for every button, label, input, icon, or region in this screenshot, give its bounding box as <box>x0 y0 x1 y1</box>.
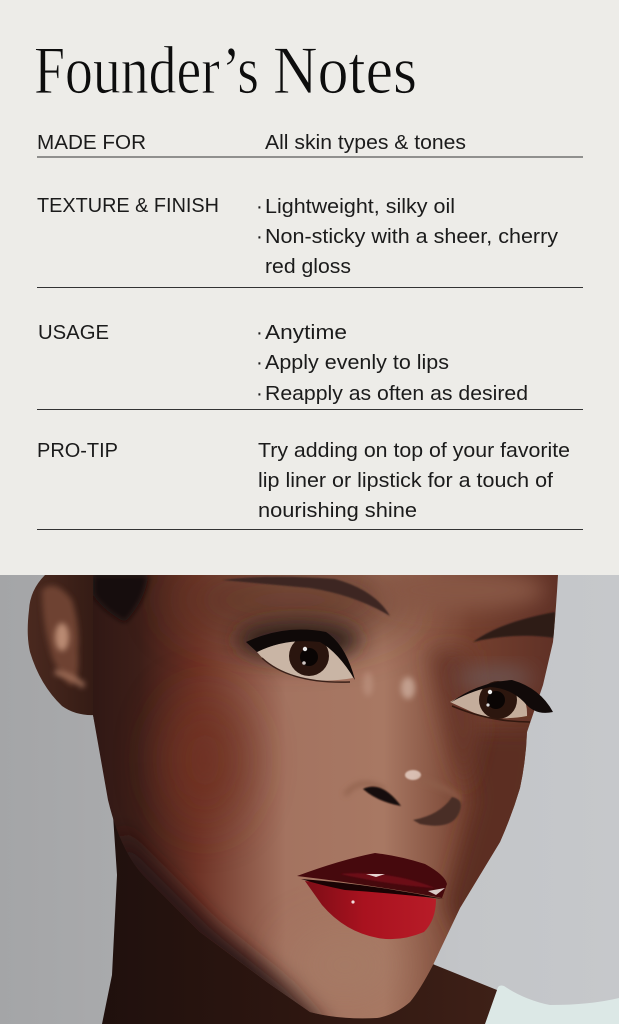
row: usage: · <box>256 321 263 344</box>
left nostril <box>363 787 401 806</box>
row: usage: Anytime <box>265 321 347 344</box>
skin: forehead <box>445 575 547 614</box>
row: texture and finish: red gloss <box>265 255 351 278</box>
neck <box>93 715 497 1024</box>
skin: upper shading <box>170 560 410 640</box>
row: texture and finish: TEXTURE & FINISH <box>37 194 219 217</box>
skin: right cheek <box>438 722 530 932</box>
title: Founder’s <box>34 32 259 108</box>
row: texture and finish: Lightweight, silky oil <box>265 195 455 218</box>
title: Notes <box>273 32 417 108</box>
row: pro-tip: PRO-TIP <box>37 439 118 462</box>
skin: blush <box>163 695 247 825</box>
lips <box>297 853 447 939</box>
hair <box>93 575 148 622</box>
row: usage: Apply evenly to lips <box>265 351 449 374</box>
left eyebrow <box>222 577 390 616</box>
face shape <box>80 560 570 1024</box>
row: usage: USAGE <box>38 321 109 344</box>
row: usage <box>37 321 583 410</box>
right eye shadow <box>457 668 533 688</box>
row: usage: · <box>256 351 263 374</box>
row: texture and finish: · <box>256 225 263 248</box>
row: made for: All skin types & tones <box>265 131 466 154</box>
row: usage: · <box>256 382 263 405</box>
row: pro-tip: lip liner or lipstick for a touch of <box>258 469 553 492</box>
row: made for <box>37 131 583 158</box>
garment <box>485 986 619 1024</box>
right nostril <box>413 797 461 826</box>
left eye shadow <box>236 620 360 660</box>
row: usage: Reapply as often as desired <box>265 382 528 405</box>
right eyebrow <box>473 612 555 642</box>
ear <box>28 575 93 716</box>
row: texture and finish: Non-sticky with a sheer, cherry <box>265 225 559 248</box>
row: texture and finish: · <box>256 195 263 218</box>
right eye <box>450 680 553 722</box>
skin: jaw shadow <box>124 841 335 1016</box>
left eye <box>246 630 355 682</box>
nose <box>425 646 471 760</box>
row: made for: MADE FOR <box>37 131 146 154</box>
portrait photo <box>0 560 619 1024</box>
row: texture and finish <box>37 194 583 288</box>
row: pro-tip <box>37 439 583 530</box>
row: pro-tip: Try adding on top of your favorite <box>258 439 570 462</box>
row: pro-tip: nourishing shine <box>258 499 417 522</box>
skin: lower face <box>271 972 317 1012</box>
